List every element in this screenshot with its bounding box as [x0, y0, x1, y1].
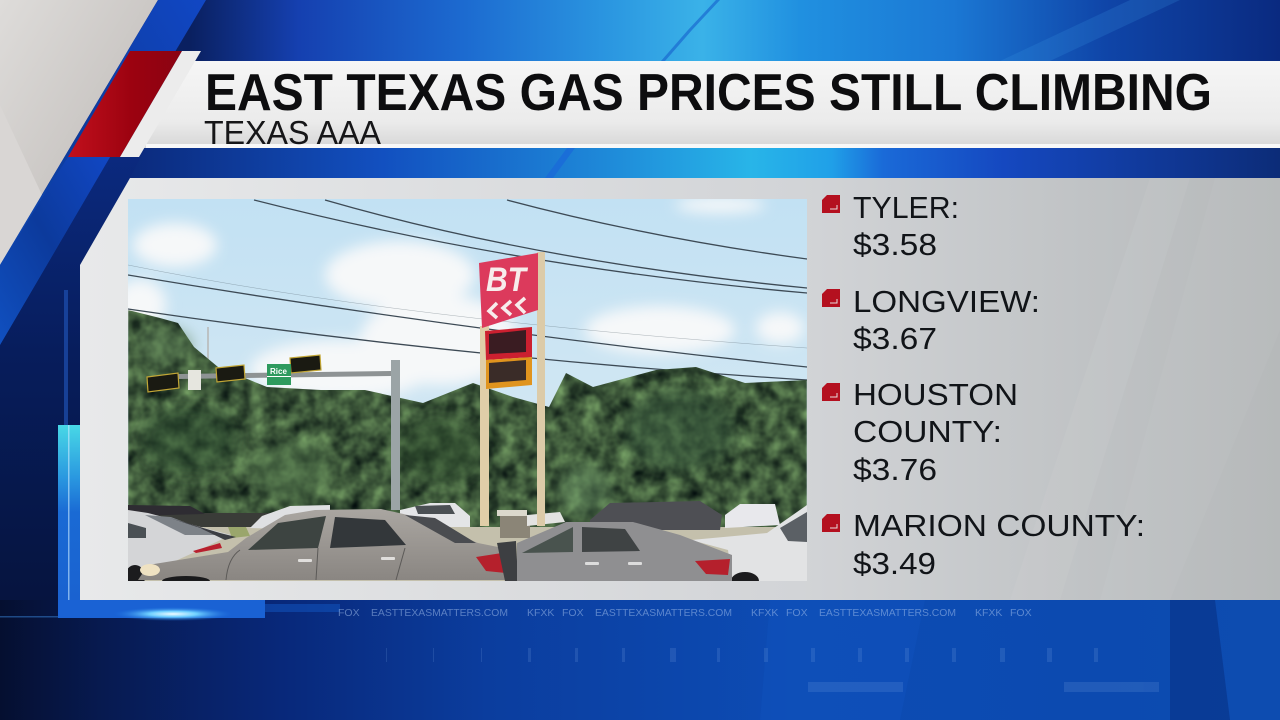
ticker text: FOX [562, 607, 584, 619]
ticker text: EASTTEXASMATTERS.COM [371, 607, 508, 619]
clouds [114, 197, 804, 400]
diagonal bands [0, 0, 206, 600]
red brand banner [479, 253, 538, 328]
ticker text: FOX [338, 607, 360, 619]
list item: Houston County [822, 377, 1018, 487]
ticker text: KFXK [751, 607, 778, 619]
street signs: Rice [270, 367, 287, 376]
traffic lights [147, 355, 321, 392]
sky [128, 199, 807, 505]
red accent [68, 51, 182, 157]
ticker text: KFXK [527, 607, 554, 619]
list item: Marion County: $3.49 [853, 546, 936, 581]
street signs [188, 364, 291, 390]
lower left frame and glow [0, 290, 340, 621]
list item: Houston County: COUNTY: [853, 414, 1002, 449]
gray sedan [138, 509, 518, 586]
list item: Longview: $3.67 [853, 321, 937, 356]
ticker text: EASTTEXASMATTERS.COM [595, 607, 732, 619]
ticker text: EASTTEXASMATTERS.COM [819, 607, 956, 619]
fuel price displays [485, 327, 532, 389]
list item: Tyler [822, 190, 959, 262]
ticker text: KFXK [975, 607, 1002, 619]
banner bar [136, 61, 1280, 148]
white truck at right [692, 505, 807, 581]
gas station sign poles [480, 252, 545, 526]
list item: Longview: LONGVIEW: [853, 284, 1040, 319]
ticker text: FOX [1010, 607, 1032, 619]
ticker text: FOX [786, 607, 808, 619]
list item: Marion County: MARION COUNTY: [853, 508, 1145, 543]
background parked cars, fence and ground [128, 501, 807, 581]
silver sedan [517, 522, 732, 581]
white accent [120, 51, 201, 157]
tree line [128, 310, 807, 530]
list item: Houston County: HOUSTON [853, 377, 1018, 412]
list item: Tyler: $3.58 [853, 227, 937, 262]
traffic signal pole [178, 360, 400, 510]
ticker text [338, 607, 1032, 619]
list item: Tyler: TYLER: [853, 190, 959, 225]
gas price list [822, 190, 1145, 581]
headline banner [68, 51, 1280, 157]
street light [207, 327, 209, 360]
list item: Houston County: $3.76 [853, 452, 937, 487]
silver car at left [128, 510, 236, 581]
red brand banner: BT [486, 261, 529, 299]
headline: EAST TEXAS GAS PRICES STILL CLIMBING [205, 64, 1212, 122]
power lines [128, 200, 807, 380]
source line: TEXAS AAA [204, 114, 381, 151]
grey corner shape [0, 0, 158, 265]
list item: Longview [822, 284, 1040, 356]
content panel [80, 178, 1280, 600]
list item: Marion County [822, 508, 1145, 581]
photo: gas station sign and traffic [114, 197, 807, 590]
faint background ticks [386, 648, 1159, 692]
